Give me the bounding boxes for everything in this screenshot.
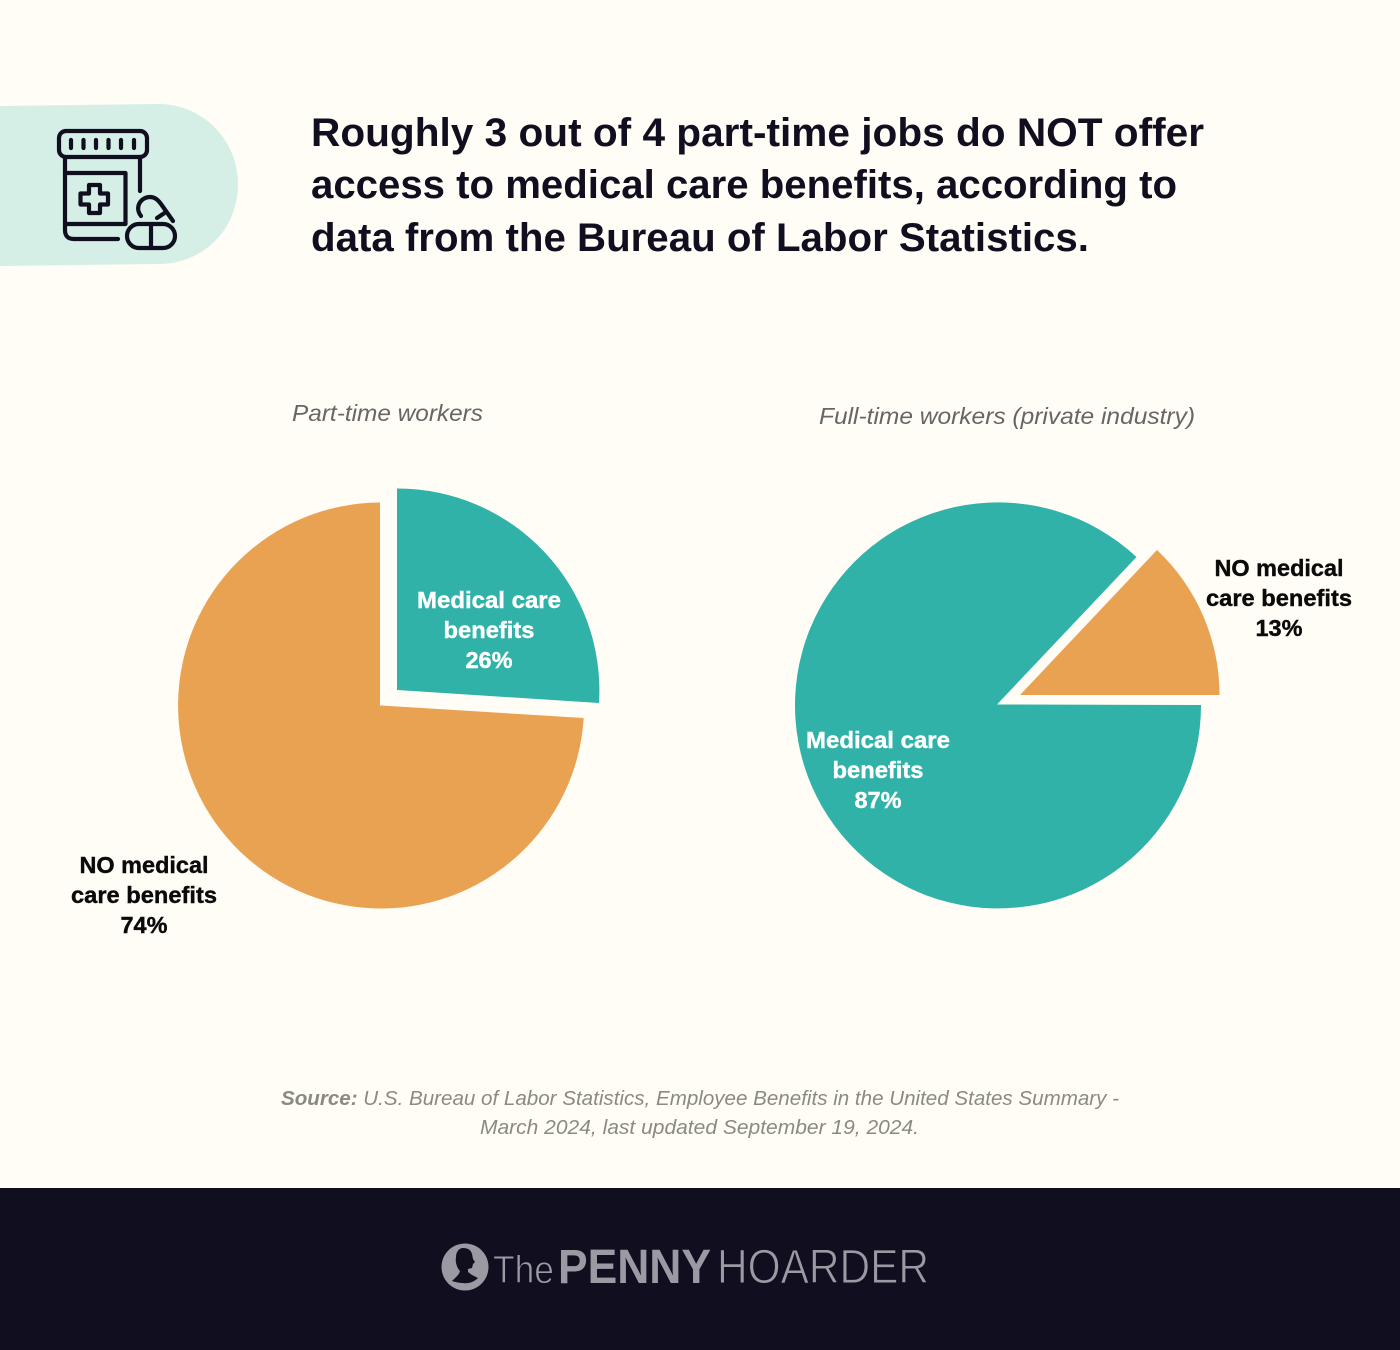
- title: Roughly 3 out of 4 part-time jobs do NOT offer: [311, 111, 1204, 155]
- slice: no medical care benefits 74%: [178, 502, 584, 908]
- label: no medical care benefits 74%: [71, 852, 217, 938]
- label: medical care benefits 87%: [806, 727, 950, 813]
- slice: no medical care benefits 13%: [1020, 550, 1220, 695]
- pie chart: full-time workers: [795, 403, 1352, 908]
- source note: March 2024, last updated September 19, 2024.: [480, 1117, 919, 1139]
- label: no medical care benefits 74%: NO medical: [80, 852, 208, 878]
- icon: medicine bottle with pills: [59, 131, 175, 248]
- label: medical care benefits 87%: Medical care: [806, 727, 950, 753]
- label: no medical care benefits 74%: 74%: [120, 912, 168, 938]
- label: no medical care benefits 13%: 13%: [1256, 615, 1302, 641]
- icon: coin with profile: [442, 1244, 488, 1290]
- label: no medical care benefits 13%: care benefits: [1206, 585, 1352, 611]
- label: medical care benefits 26%: benefits: [444, 617, 534, 643]
- label: no medical care benefits 13%: NO medical: [1214, 555, 1344, 581]
- title: access to medical care benefits, according to: [311, 163, 1177, 207]
- label: medical care benefits 26%: Medical care: [417, 587, 561, 613]
- pie chart: part-time workers: [71, 400, 599, 938]
- label: medical care benefits 87%: benefits: [832, 757, 924, 783]
- label: medical care benefits 26%: [417, 587, 561, 673]
- logo word: HOARDER: HOARDER: [717, 1241, 929, 1294]
- label: medical care benefits 87%: 87%: [854, 787, 902, 813]
- logo: The Penny Hoarder: [442, 1241, 929, 1294]
- chart title: full-time workers: Full-time workers (private industry): [819, 403, 1195, 429]
- label: medical care benefits 26%: 26%: [466, 647, 512, 673]
- footer band: [0, 1188, 1400, 1350]
- logo word: PENNY: PENNY: [558, 1241, 711, 1294]
- source note: [281, 1088, 1119, 1139]
- icon banner: [0, 104, 238, 266]
- slice: medical care benefits 87%: [795, 502, 1201, 908]
- label: no medical care benefits 13%: [1206, 555, 1352, 641]
- label: no medical care benefits 74%: care benefits: [71, 882, 217, 908]
- source note: Source: U.S. Bureau of Labor Statistics, Employee Benefits in the United States Summary -: [281, 1088, 1119, 1110]
- slice: medical care benefits 26%: [397, 488, 599, 703]
- logo word: The: The: [493, 1249, 554, 1292]
- title: [311, 111, 1204, 260]
- chart title: part-time workers: Part-time workers: [292, 400, 484, 426]
- title: data from the Bureau of Labor Statistics.: [311, 216, 1089, 260]
